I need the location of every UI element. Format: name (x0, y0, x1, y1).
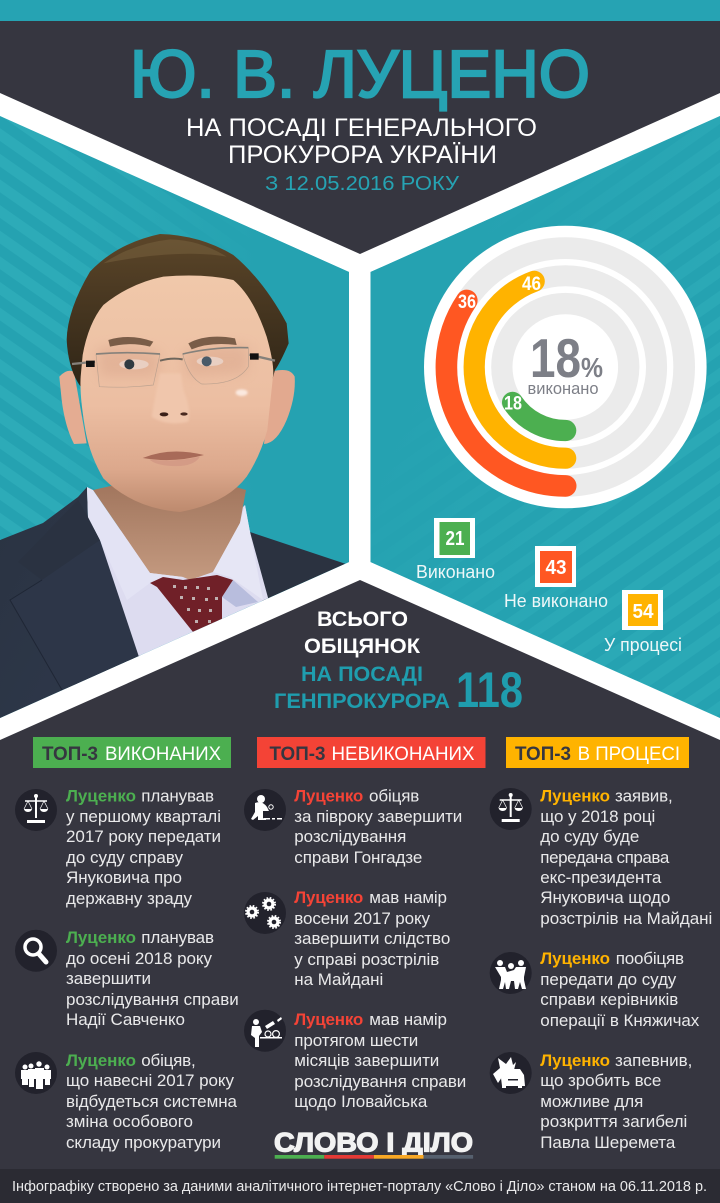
text: promise 2 done: завершити (66, 969, 151, 988)
text: promise 3 in progress: можливе для (540, 1092, 643, 1111)
text: promise 3 done: що навесні 2017 року (66, 1071, 234, 1090)
heading: top-3 in progress: ТОП-3 (515, 743, 571, 765)
total promises: ОБІЦЯНОК (304, 635, 420, 658)
eyebrows (108, 337, 153, 347)
text: promise 3 in progress: Павла Шеремета (540, 1133, 676, 1152)
heading: top-3 not done (257, 737, 486, 768)
eyes (119, 359, 149, 369)
text: promise 3 in progress: запевнив, (615, 1051, 692, 1070)
collar right (213, 505, 263, 600)
legend: in progress (604, 590, 682, 655)
text: promise 3 in progress: Луценко (540, 1051, 610, 1070)
text: promise 3 not done: місяців завершити (294, 1051, 439, 1070)
text: promise 1 done: Януковича про (66, 868, 182, 887)
face (80, 276, 273, 512)
text: promise 1 in progress: Януковича щодо (540, 888, 670, 907)
text: promise 1 in progress: Луценко (540, 787, 610, 806)
text: promise 2 not done (294, 888, 450, 989)
text: promise 2 not done: у справі розстрілів (294, 950, 439, 969)
face shading (99, 347, 158, 376)
radial bar chart: виконано (528, 379, 598, 398)
heading: top-3 done: ВИКОНАНИХ (105, 743, 221, 765)
top teal bar (0, 0, 720, 21)
icon: bullet holes (244, 892, 286, 934)
text: promise 2 not done: на Майдані (294, 970, 383, 989)
text: promise 1 not done: справи Гонгадзе (294, 848, 422, 867)
text: promise 3 not done (294, 1010, 466, 1111)
heading: top-3 done (33, 737, 231, 768)
radial bar chart: % (581, 352, 603, 383)
collar left (87, 487, 182, 577)
suit jacket left (0, 487, 140, 730)
text: promise 1 done (66, 787, 221, 908)
legend: not done: Не виконано (504, 591, 608, 611)
subtitle (186, 114, 537, 169)
text: promise 3 done: складу прокуратури (66, 1133, 221, 1152)
text: promise 2 not done: восени 2017 року (294, 909, 430, 928)
nose and mouth (152, 373, 189, 423)
icon: scales (490, 788, 532, 830)
footer (0, 1169, 720, 1203)
footer: Інфографіку створено за даними аналітичного інтернет-порталу «Слово і Діло» станом на 06.11.2018 р. (12, 1179, 707, 1195)
white divider frame (0, 93, 720, 740)
text: promise 1 done: Луценко (66, 787, 136, 806)
glasses (72, 348, 275, 387)
icon: three men (490, 952, 532, 994)
icon: magnifier (15, 930, 57, 972)
icon: investigator (244, 789, 286, 831)
text: promise 1 not done: обіцяв (369, 787, 419, 806)
panel: left teal photo panel (0, 116, 349, 730)
text: promise 3 done (66, 1051, 238, 1152)
legend: in progress: У процесі (604, 635, 682, 655)
icon: staff group (15, 1052, 57, 1094)
text: promise 3 done: обіцяв, (141, 1051, 196, 1070)
heading: top-3 done: ТОП-3 (42, 743, 98, 765)
legend: in progress: 54 (632, 601, 654, 623)
radial bar chart (424, 226, 707, 508)
text: promise 3 in progress: розкриття загибелі (540, 1112, 687, 1131)
heading: top-3 in progress (506, 737, 689, 768)
ears (59, 371, 87, 444)
radial bar chart: 46 (522, 274, 541, 295)
legend: done (416, 518, 495, 582)
text: promise 3 in progress (540, 1051, 692, 1152)
text: promise 2 in progress (540, 949, 700, 1030)
text: promise 2 in progress: Луценко (540, 949, 610, 968)
total promises (274, 608, 523, 718)
legend: not done: 43 (546, 557, 566, 579)
icon: car explosion (490, 1052, 532, 1094)
total promises: ВСЬОГО (317, 608, 408, 631)
suit jacket right (250, 532, 346, 602)
necktie (150, 575, 233, 632)
text: promise 1 done: у першому кварталі (66, 807, 221, 826)
text: promise 1 done: планував (141, 787, 214, 806)
icon: Ilovaisk battle (244, 1010, 286, 1052)
text: promise 3 done: відбудеться системна (66, 1092, 238, 1111)
heading: top-3 in progress: В ПРОЦЕСІ (578, 743, 680, 765)
text: promise 1 not done: за півроку завершити (294, 807, 462, 826)
text: promise 1 not done: розслідування (294, 827, 406, 846)
text: promise 1 not done: Луценко (294, 787, 363, 806)
heading: top-3 not done: ТОП-3 (270, 743, 326, 765)
legend: not done (504, 546, 608, 611)
total promises: 118 (456, 662, 523, 718)
radial bar chart: 18 (530, 327, 581, 389)
text: promise 2 not done: завершити слідство (294, 929, 450, 948)
text: promise 3 not done: розслідування справи (294, 1072, 466, 1091)
radial bar chart: 36 (458, 292, 476, 313)
date: З 12.05.2016 РОКУ (265, 172, 460, 195)
radial bar chart: 18 (504, 394, 522, 414)
neck (93, 486, 246, 580)
subtitle: НА ПОСАДІ ГЕНЕРАЛЬНОГО (186, 114, 537, 142)
subtitle: ПРОКУРОРА УКРАЇНИ (228, 141, 497, 169)
text: promise 2 in progress: пообіцяв (616, 949, 684, 968)
text: promise 1 done: державну зраду (66, 889, 192, 908)
text: promise 1 in progress: екс-президента (540, 868, 662, 887)
icon: scales (15, 789, 57, 831)
text: promise 3 not done: протягом шести (294, 1031, 418, 1050)
text: promise 1 in progress: розстрілів на Майдані (540, 909, 712, 928)
heading: top-3 not done: НЕВИКОНАНИХ (332, 743, 474, 765)
hair (67, 234, 289, 390)
text: promise 1 done: 2017 року передати (66, 827, 221, 846)
text: promise 3 done: зміна особового (66, 1112, 193, 1131)
text: promise 1 in progress: до суду буде (540, 827, 639, 846)
text: promise 2 in progress: операції в Княжичах (540, 1011, 700, 1030)
text: promise 2 in progress: справи керівників (540, 990, 678, 1009)
title: Ю. В. ЛУЦЕНО (130, 37, 590, 112)
text: promise 1 not done (294, 787, 462, 867)
text: promise 2 done: планував (141, 928, 214, 947)
panel: right teal chart panel (370, 116, 720, 718)
logo: СЛОВО І ДІЛО (274, 1128, 473, 1158)
legend: done: Виконано (416, 562, 495, 582)
text: promise 1 in progress (540, 787, 712, 928)
text: promise 1 done: до суду справу (66, 848, 184, 867)
legend: done: 21 (446, 528, 464, 550)
text: promise 1 in progress: передана справа (540, 848, 670, 867)
text: promise 2 not done: мав намір (369, 888, 447, 907)
total promises: ГЕНПРОКУРОРА (274, 690, 450, 713)
shirt (87, 487, 270, 660)
text: promise 2 done: розслідування справи (66, 990, 239, 1009)
text: promise 2 done: Луценко (66, 928, 136, 947)
text: promise 3 not done: Луценко (294, 1010, 363, 1029)
text: promise 2 not done: Луценко (294, 888, 363, 907)
text: promise 2 done: Надії Савченко (66, 1010, 185, 1029)
text: promise 2 done: до осені 2018 року (66, 949, 212, 968)
text: promise 2 in progress: передати до суду (540, 970, 677, 989)
text: promise 2 done (66, 928, 239, 1029)
head (59, 234, 295, 512)
portrait illustration (0, 234, 349, 730)
text: promise 3 in progress: що зробить все (540, 1071, 661, 1090)
text: promise 3 not done: щодо Іловайська (294, 1092, 428, 1111)
text: promise 3 done: Луценко (66, 1051, 136, 1070)
total promises: НА ПОСАДІ (301, 663, 423, 686)
text: promise 1 in progress: що у 2018 році (540, 807, 655, 826)
text: promise 1 in progress: заявив, (615, 787, 673, 806)
text: promise 3 not done: мав намір (369, 1010, 447, 1029)
